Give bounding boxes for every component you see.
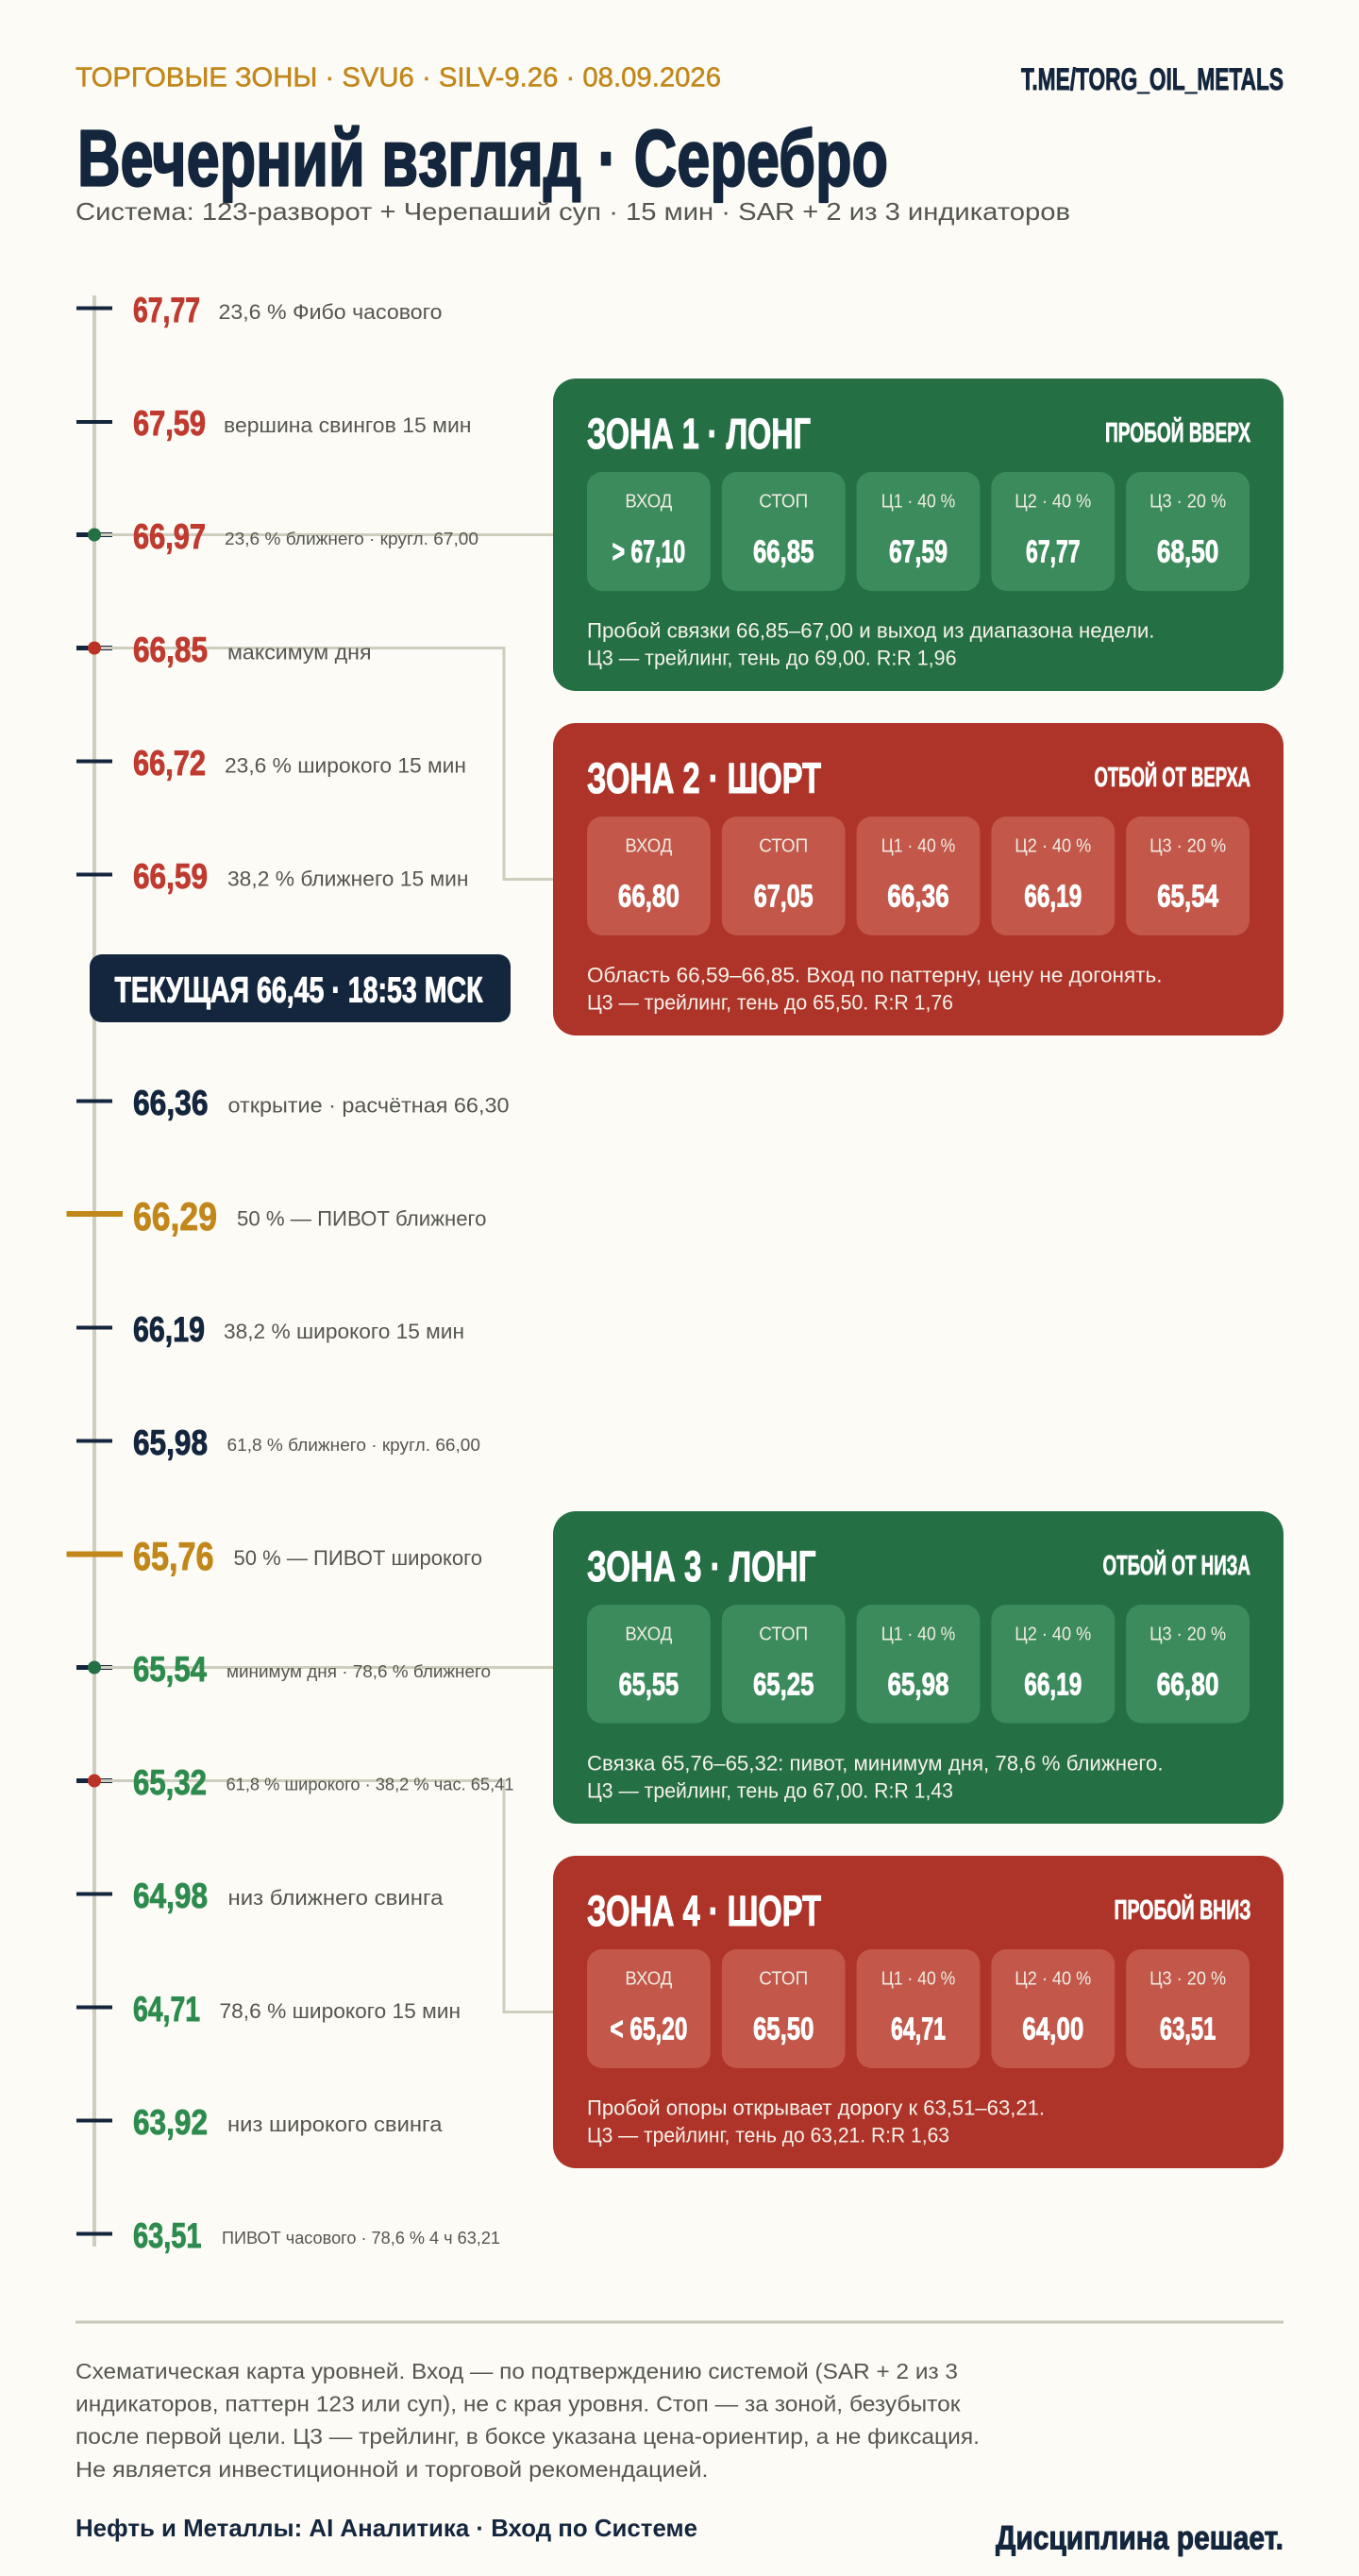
level 66,97 with long-entry marker: 23,6 % ближнего · кругл. 67,00 (225, 529, 478, 548)
zone 1 target 3 (1126, 472, 1250, 591)
price scale spine (92, 295, 96, 2247)
zone 4 stop: СТОП (759, 1969, 808, 1990)
zone 1 stop: СТОП (759, 491, 808, 512)
zone 2 target 3: Ц3 · 20 % (1149, 836, 1226, 857)
footer brand line: Нефть и Металлы: AI Аналитика · Вход по Системе (76, 2514, 697, 2542)
zone 4 note: Пробой опоры открывает дорогу к 63,51–63,21. (587, 2096, 1045, 2120)
disclaimer: Схематическая карта уровней. Вход — по подтверждению системой (SAR + 2 из 3 (76, 2359, 958, 2383)
zone 4 stop: 65,50 (753, 2011, 814, 2046)
level 65,98: 61,8 % ближнего · кругл. 66,00 (226, 1435, 480, 1455)
zone 1 note: Пробой связки 66,85–67,00 и выход из диапазона недели. (587, 619, 1155, 642)
current price badge (90, 954, 511, 1022)
level 63,51: 63,51 (133, 2216, 202, 2255)
level 64,71: 64,71 (133, 1990, 200, 2029)
zone 2 target 2: Ц2 · 40 % (1015, 836, 1091, 857)
level 66,36: 66,36 (133, 1084, 208, 1122)
level 65,32 with short-entry marker: 61,8 % широкого · 38,2 % час. 65,41 (226, 1775, 513, 1793)
zone 1 entry: ВХОД (625, 491, 673, 512)
header (76, 62, 1284, 226)
zone 3 note (587, 1752, 1163, 1803)
zone 4 target 3: Ц3 · 20 % (1149, 1969, 1226, 1990)
panel: zone 1 long (553, 379, 1284, 691)
zone 3 note: Связка 65,76–65,32: пивот, минимум дня, 78,6 % ближнего. (587, 1752, 1163, 1775)
level 66,29 pivot (66, 1194, 487, 1238)
zone 2 tag: ОТБОЙ ОТ ВЕРХА (1095, 761, 1250, 793)
zone 1 stop: 66,85 (753, 534, 814, 568)
level 67,77: 23,6 % Фибо часового (219, 300, 442, 324)
zone 4 heading: ЗОНА 4 · ШОРТ (587, 1887, 821, 1935)
level 67,59: 67,59 (133, 404, 206, 443)
zone 4 target 2: Ц2 · 40 % (1015, 1969, 1091, 1990)
zone 4 target 3: 63,51 (1160, 2011, 1216, 2046)
level 66,29 pivot: 66,29 (133, 1194, 217, 1238)
panel: zone 2 short (553, 723, 1284, 1035)
zone 3 target 1 (857, 1605, 980, 1724)
zone 1 entry (587, 472, 711, 591)
header kicker: ТОРГОВЫЕ ЗОНЫ · SVU6 · SILV-9.26 · 08.09.2026 (76, 62, 721, 93)
current price badge: ТЕКУЩАЯ 66,45 · 18:53 МСК (115, 970, 483, 1010)
zone 4 entry: ВХОД (625, 1969, 673, 1990)
zone 1 tag: ПРОБОЙ ВВЕРХ (1105, 416, 1250, 448)
level 65,76 pivot: 50 % — ПИВОТ широкого (234, 1546, 482, 1570)
level 66,19 (76, 1310, 464, 1349)
level 66,72: 23,6 % широкого 15 мин (225, 753, 466, 778)
zone 2 target 1 (857, 817, 980, 935)
zone 1 stop (722, 472, 846, 591)
level 66,19: 38,2 % широкого 15 мин (224, 1320, 464, 1343)
level 63,92: 63,92 (133, 2103, 208, 2142)
zone 3 note: Ц3 — трейлинг, тень до 67,00. R:R 1,43 (587, 1778, 953, 1803)
zone 2 note: Область 66,59–66,85. Вход по паттерну, цену не догонять. (587, 963, 1163, 987)
level 66,19: 66,19 (133, 1310, 205, 1349)
level 66,36: открытие · расчётная 66,30 (228, 1093, 510, 1118)
level 65,54 with long-entry marker: 65,54 (133, 1650, 207, 1689)
panel: zone 3 long (553, 1511, 1284, 1824)
disclaimer: индикаторов, паттерн 123 или суп), не с края уровня. Стоп — за зоной, безубыток (76, 2392, 962, 2416)
level 65,98: 65,98 (133, 1423, 208, 1462)
zone 2 heading: ЗОНА 2 · ШОРТ (587, 754, 821, 802)
zone 4 entry: < 65,20 (610, 2011, 687, 2046)
zone 3 heading: ЗОНА 3 · ЛОНГ (587, 1542, 815, 1591)
zone 3 entry: ВХОД (625, 1624, 673, 1644)
zone 3 stop: 65,25 (753, 1667, 814, 1701)
zone 3 target 2 (991, 1605, 1115, 1724)
zone 4 target 1: Ц1 · 40 % (881, 1969, 955, 1990)
level 67,77 (76, 291, 442, 329)
level 65,32 with short-entry marker: 65,32 (133, 1763, 207, 1802)
zone 3 target 3: Ц3 · 20 % (1149, 1624, 1226, 1644)
level 66,59: 66,59 (133, 857, 208, 896)
zone 4 target 2 (991, 1949, 1115, 2068)
zone 3 tag: ОТБОЙ ОТ НИЗА (1102, 1549, 1250, 1581)
level 66,97 with long-entry marker (76, 517, 478, 556)
level 64,98 (76, 1877, 444, 1915)
zone 4 target 1: 64,71 (891, 2011, 946, 2046)
level 64,98: 64,98 (133, 1877, 208, 1915)
level 66,72: 66,72 (133, 744, 206, 783)
zone 1 target 3: 68,50 (1157, 534, 1218, 568)
level 67,59: вершина свингов 15 мин (224, 413, 472, 437)
level 66,72 (76, 744, 466, 783)
level 65,54 with long-entry marker: минимум дня · 78,6 % ближнего (226, 1661, 491, 1681)
zone 1 target 2: 67,77 (1026, 534, 1081, 568)
level 66,59 (76, 857, 468, 896)
zone 4 entry (587, 1949, 711, 2068)
zone 2 entry (587, 817, 711, 935)
title: Вечерний взгляд · Серебро (77, 113, 888, 202)
level 66,85 with short-entry marker: максимум дня (227, 640, 372, 665)
zone 3 target 2: Ц2 · 40 % (1015, 1624, 1091, 1644)
subtitle: Система: 123-разворот + Черепаший суп · 15 мин · SAR + 2 из 3 индикаторов (76, 197, 1070, 226)
zone 1 note (587, 619, 1155, 670)
zone 3 target 3 (1126, 1605, 1250, 1724)
zone 1 target 2 (991, 472, 1115, 591)
zone 4 stop (722, 1949, 846, 2068)
zone 2 note (587, 963, 1163, 1014)
level 64,71: 78,6 % широкого 15 мин (219, 1999, 461, 2023)
level 67,59 (76, 404, 472, 443)
level 67,77: 67,77 (133, 291, 200, 329)
zone 3 stop (722, 1605, 846, 1724)
level 65,98 (76, 1423, 480, 1462)
zone 4 tag: ПРОБОЙ ВНИЗ (1114, 1894, 1251, 1926)
level 64,98: низ ближнего свинга (228, 1886, 444, 1910)
level 66,85 with short-entry marker (76, 631, 372, 669)
zone 2 entry: ВХОД (625, 836, 673, 857)
zone 3 target 2: 66,19 (1024, 1667, 1082, 1701)
level 63,51: ПИВОТ часового · 78,6 % 4 ч 63,21 (222, 2228, 500, 2248)
zone 2 target 3: 65,54 (1157, 878, 1219, 914)
zone 1 target 3: Ц3 · 20 % (1149, 491, 1226, 512)
zone 3 entry: 65,55 (619, 1667, 679, 1701)
zone 4 target 2: 64,00 (1022, 2011, 1083, 2046)
zone 3 target 3: 66,80 (1157, 1667, 1219, 1701)
zone 1 entry: > 67,10 (612, 534, 685, 568)
level 65,32 with short-entry marker (76, 1763, 513, 1802)
zone 2 note: Ц3 — трейлинг, тень до 65,50. R:R 1,76 (587, 991, 953, 1014)
level 64,71 (76, 1990, 461, 2029)
level 65,76 pivot (66, 1534, 482, 1578)
zone 2 stop: СТОП (759, 836, 808, 857)
zone 2 target 3 (1126, 817, 1250, 935)
zone 2 target 2: 66,19 (1024, 878, 1082, 914)
level 66,85 with short-entry marker: 66,85 (133, 631, 208, 669)
zone 1 target 2: Ц2 · 40 % (1015, 491, 1091, 512)
zone 4 note (587, 2096, 1045, 2147)
level 63,92: низ широкого свинга (227, 2113, 443, 2136)
level 65,54 with long-entry marker (76, 1650, 491, 1689)
level 66,59: 38,2 % ближнего 15 мин (227, 867, 468, 891)
zone 3 target 1: Ц1 · 40 % (881, 1624, 955, 1644)
zone 2 target 2 (991, 817, 1115, 935)
level 66,36 (76, 1084, 510, 1122)
footer slogan: Дисциплина решает. (996, 2520, 1284, 2556)
zone 1 note: Ц3 — трейлинг, тень до 69,00. R:R 1,96 (587, 646, 957, 670)
level 65,76 pivot: 65,76 (133, 1534, 213, 1578)
zone 3 stop: СТОП (759, 1624, 808, 1644)
zone 1 target 1: 67,59 (889, 534, 948, 568)
panel: zone 4 short (553, 1856, 1284, 2168)
disclaimer (76, 2359, 980, 2482)
level 63,92 (76, 2103, 443, 2142)
zone 3 target 1: 65,98 (887, 1667, 949, 1701)
zone 4 target 3 (1126, 1949, 1250, 2068)
zone 4 note: Ц3 — трейлинг, тень до 63,21. R:R 1,63 (587, 2124, 949, 2147)
zone 1 target 1 (857, 472, 980, 591)
level 66,29 pivot: 50 % — ПИВОТ ближнего (237, 1206, 487, 1231)
zone 2 entry: 66,80 (618, 878, 680, 914)
zone 4 target 1 (857, 1949, 980, 2068)
zone 2 stop: 67,05 (754, 878, 814, 914)
zone 3 entry (587, 1605, 711, 1724)
connectors: levels to zone cards (94, 534, 553, 2012)
level 66,97 with long-entry marker: 66,97 (133, 517, 206, 556)
zone 1 target 1: Ц1 · 40 % (881, 491, 955, 512)
zone 2 stop (722, 817, 846, 935)
zone 1 heading: ЗОНА 1 · ЛОНГ (587, 410, 811, 458)
level 63,51 (76, 2216, 500, 2255)
zone 2 target 1: Ц1 · 40 % (881, 836, 955, 857)
zone 2 target 1: 66,36 (887, 878, 949, 914)
disclaimer: после первой цели. Ц3 — трейлинг, в боксе указана цена-ориентир, а не фиксация. (76, 2424, 980, 2449)
disclaimer: Не является инвестиционной и торговой рекомендацией. (76, 2457, 708, 2482)
